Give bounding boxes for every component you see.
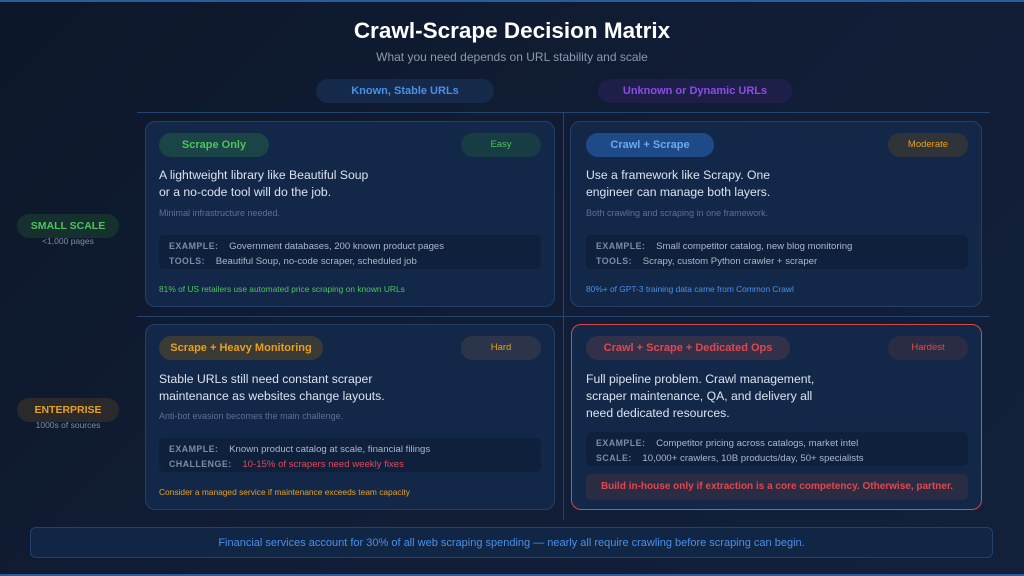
panel: crawl + scrape: Crawl + Scrape [610, 139, 690, 151]
panel: scrape + heavy monitoring: maintenance as websites change layouts. [159, 389, 385, 403]
panel: scrape only: Easy [490, 139, 512, 150]
panel: scrape + heavy monitoring: EXAMPLE: Known product catalog at scale, financial filings [169, 444, 430, 455]
panel: scrape + heavy monitoring: Scrape + Heavy Monitoring [170, 342, 312, 354]
panel: scrape only: 81% of US retailers use automated price scraping on known URLs [159, 284, 405, 294]
row label: small scale: SMALL SCALE [31, 220, 105, 232]
panel: scrape only: A lightweight library like Beautiful Soup [159, 168, 368, 182]
panel: crawl + scrape + dedicated ops [571, 324, 982, 510]
column header: known URLs [316, 79, 494, 103]
row label: small scale [17, 214, 119, 246]
panel: crawl + scrape + dedicated ops: Crawl + Scrape + Dedicated Ops [604, 342, 772, 354]
panel: crawl + scrape [570, 121, 982, 307]
panel: crawl + scrape + dedicated ops: need dedicated resources. [586, 406, 730, 420]
panel: crawl + scrape + dedicated ops: SCALE: 10,000+ crawlers, 10B products/day, 50+ specialists [596, 453, 864, 464]
panel: scrape + heavy monitoring: Consider a managed service if maintenance exceeds team capacity [159, 487, 410, 497]
column header: unknown URLs: Unknown or Dynamic URLs [623, 85, 767, 97]
footer banner [30, 527, 993, 558]
panel: scrape only: EXAMPLE: Government databases, 200 known product pages [169, 241, 444, 252]
footer banner: Financial services account for 30% of all web scraping spending — nearly all require crawling before scraping can begin. [218, 537, 805, 549]
subtitle: What you need depends on URL stability and scale [376, 50, 648, 64]
panel: scrape only: or a no-code tool will do the job. [159, 185, 331, 199]
panel: crawl + scrape + dedicated ops: Hardest [911, 342, 945, 353]
row label: small scale: <1,000 pages [42, 236, 94, 246]
panel: crawl + scrape: Use a framework like Scrapy. One [586, 168, 770, 182]
panel: crawl + scrape: engineer can manage both layers. [586, 185, 770, 199]
panel: scrape + heavy monitoring: Stable URLs still need constant scraper [159, 372, 372, 386]
panel: scrape only: TOOLS: Beautiful Soup, no-code scraper, scheduled job [169, 256, 417, 267]
panel: scrape + heavy monitoring [145, 324, 555, 510]
title: Crawl-Scrape Decision Matrix [354, 18, 670, 43]
panel: scrape only [145, 121, 555, 307]
panel: crawl + scrape + dedicated ops: Full pipeline problem. Crawl management, [586, 372, 814, 386]
panel: crawl + scrape: Both crawling and scraping in one framework. [586, 208, 768, 218]
panel: crawl + scrape: 80%+ of GPT-3 training data came from Common Crawl [586, 284, 794, 294]
callout: build in-house: Build in-house only if extraction is a core competency. Otherwise, partner. [601, 481, 953, 492]
panel: crawl + scrape + dedicated ops: EXAMPLE: Competitor pricing across catalogs, market intel [596, 438, 858, 449]
panel: crawl + scrape: TOOLS: Scrapy, custom Python crawler + scraper [596, 256, 817, 267]
row label: enterprise: ENTERPRISE [34, 404, 102, 416]
panel: crawl + scrape: Moderate [908, 139, 948, 150]
panel: scrape only: Minimal infrastructure needed. [159, 208, 280, 218]
row label: enterprise: 1000s of sources [36, 420, 100, 430]
panel: scrape + heavy monitoring: Hard [491, 342, 511, 353]
row label: enterprise [17, 398, 119, 430]
panel: crawl + scrape + dedicated ops: scraper maintenance, QA, and delivery all [586, 389, 812, 403]
callout: build in-house [586, 474, 968, 500]
column header: unknown URLs [598, 79, 792, 103]
panel: crawl + scrape: EXAMPLE: Small competitor catalog, new blog monitoring [596, 241, 852, 252]
column header: known URLs: Known, Stable URLs [351, 85, 459, 97]
panel: scrape + heavy monitoring: Anti-bot evasion becomes the main challenge. [159, 411, 343, 421]
panel: scrape + heavy monitoring: CHALLENGE: 10-15% of scrapers need weekly fixes [169, 459, 404, 470]
panel: scrape only: Scrape Only [182, 139, 246, 151]
